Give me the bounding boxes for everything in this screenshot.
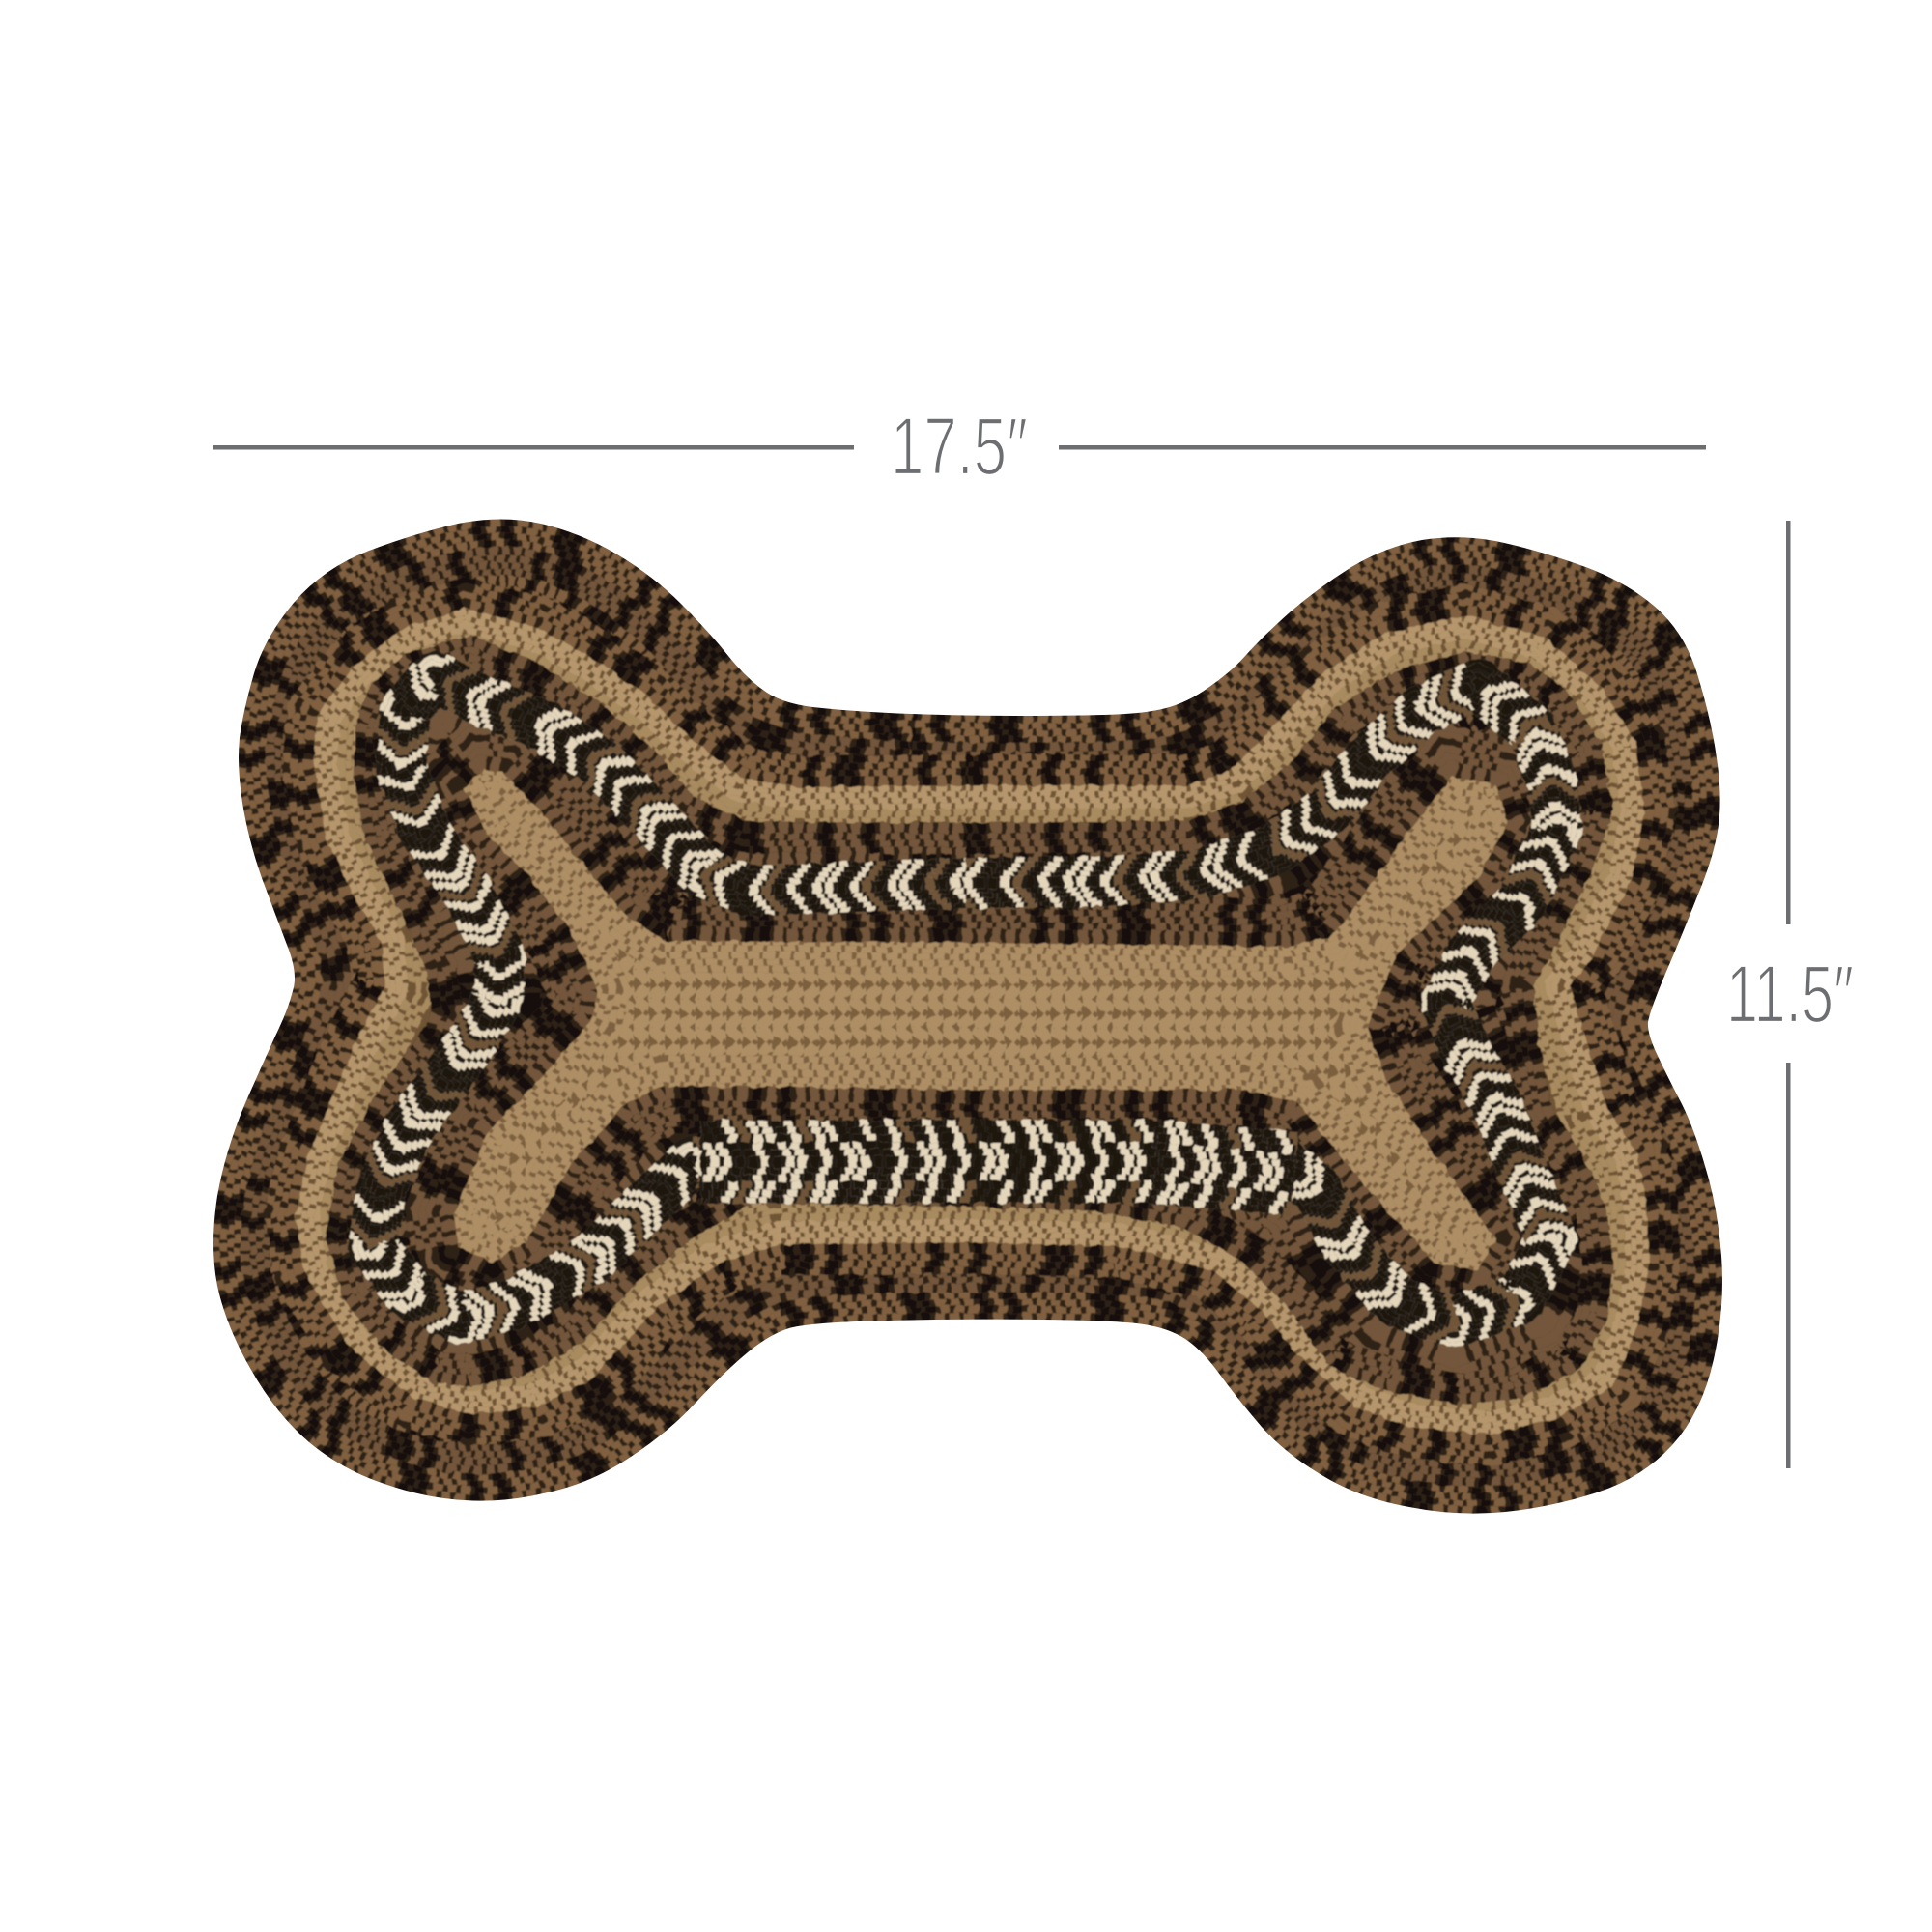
tan braid band <box>296 609 1649 1435</box>
width dimension: 17.5 inches: 17.5″ <box>891 401 1028 492</box>
inner dark brown braid band <box>327 635 1613 1405</box>
center tan braid with four arms <box>454 770 1508 1270</box>
braided bone-shaped rug <box>213 520 1722 1514</box>
outer dark brown braid band <box>213 520 1722 1514</box>
height dimension: 11.5 inches: 11.5″ <box>1726 949 1854 1039</box>
height dimension: 11.5 inches <box>1726 521 1854 1468</box>
width dimension: 17.5 inches <box>213 401 1706 492</box>
black and cream braid band <box>373 676 1557 1322</box>
